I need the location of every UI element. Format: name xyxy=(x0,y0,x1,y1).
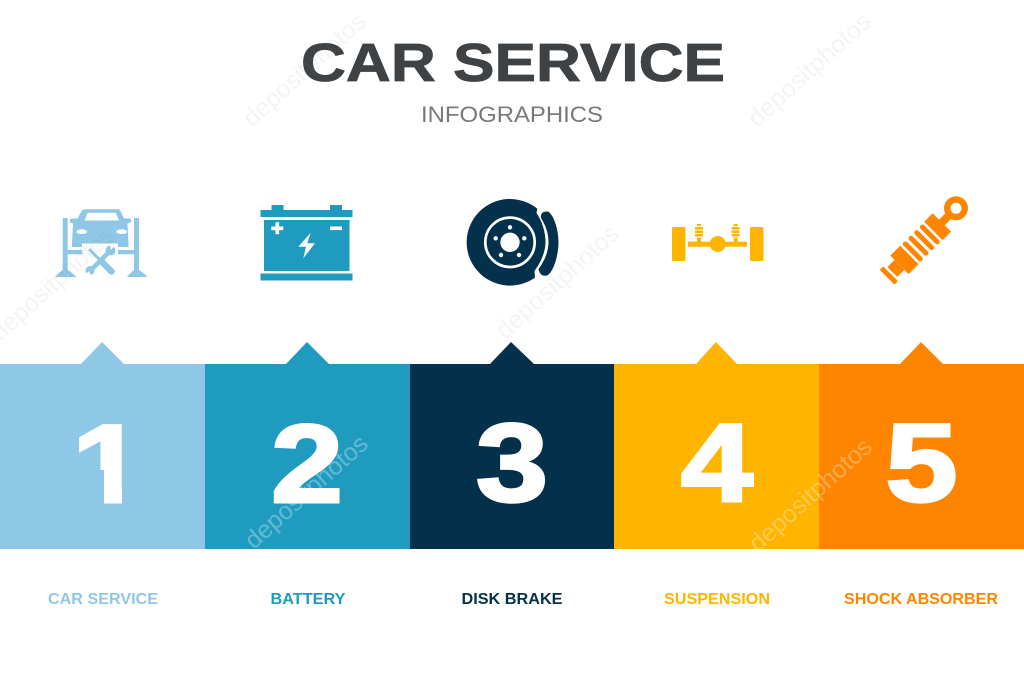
label: car service: CAR SERVICE xyxy=(48,591,158,608)
icon: suspension axle xyxy=(672,224,764,261)
number 2: 2 xyxy=(271,402,343,526)
icon: disk brake xyxy=(467,199,558,286)
watermarks: depositphotos xyxy=(743,432,878,557)
number 3: 3 xyxy=(476,401,548,525)
panel: step 3 xyxy=(410,342,614,549)
label: battery: BATTERY xyxy=(270,591,346,608)
panel: step 2 xyxy=(205,342,410,549)
icon: shock absorber xyxy=(878,191,974,286)
label: shock absorber: SHOCK ABSORBER xyxy=(844,591,998,608)
panel: step 5 xyxy=(819,342,1024,549)
panel: step 1 xyxy=(0,342,205,549)
number 5: 5 xyxy=(886,401,958,525)
icon: battery xyxy=(260,205,352,280)
number 1: 1 xyxy=(72,402,144,526)
subtitle: INFOGRAPHICS xyxy=(421,102,603,127)
watermarks: depositphotos xyxy=(490,219,625,344)
title: CAR SERVICE xyxy=(301,33,725,93)
label: disk brake: DISK BRAKE xyxy=(462,591,562,608)
number 4: 4 xyxy=(681,401,753,525)
watermarks: depositphotos xyxy=(742,7,877,132)
label: suspension: SUSPENSION xyxy=(664,591,770,608)
panel: step 4 xyxy=(614,342,819,549)
icon: car on lift with tools xyxy=(55,209,148,277)
watermarks xyxy=(0,7,878,557)
watermarks: depositphotos xyxy=(239,429,374,554)
watermarks: depositphotos xyxy=(237,7,372,132)
